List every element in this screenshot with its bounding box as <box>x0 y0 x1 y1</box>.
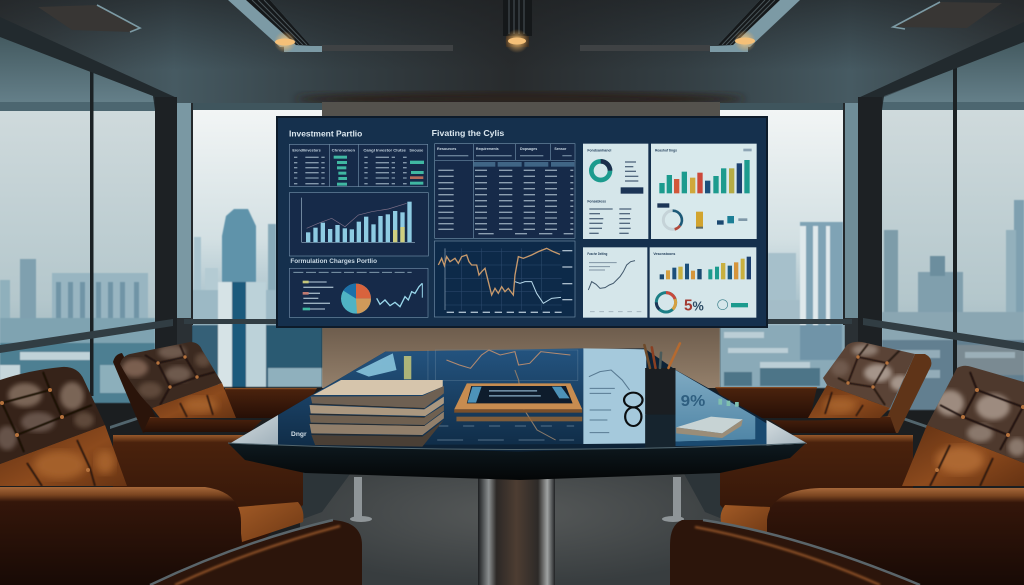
ceiling light left <box>274 31 296 53</box>
seat shell <box>113 435 303 560</box>
front arm <box>0 487 241 585</box>
donut <box>656 293 676 312</box>
dashboard left column <box>289 128 575 317</box>
far left mullion <box>90 64 94 396</box>
panel: bar charts <box>651 144 757 239</box>
wall display <box>276 116 768 328</box>
panel: performance table: Dopsages <box>520 146 538 151</box>
ceiling louvre centre <box>503 0 532 36</box>
glasses <box>624 393 643 426</box>
panel: line chart <box>434 241 575 317</box>
panel: performance table: Requirements <box>476 146 499 151</box>
pen holder <box>644 343 680 449</box>
heading: investment portfolio: Investment Partlio <box>289 128 362 138</box>
left column <box>155 97 193 398</box>
reflected line chart <box>446 350 570 368</box>
chair rear left <box>113 340 317 433</box>
conference table <box>228 343 807 480</box>
tablet <box>454 383 582 421</box>
glass top <box>230 343 807 452</box>
panel: trend line: Fusche Delting <box>587 251 608 256</box>
panel: performance table: Sensor <box>554 146 567 151</box>
upper cushion <box>0 365 106 465</box>
left highlight <box>230 415 278 445</box>
heading: formulation charges: Formulation Charges Portlio <box>290 258 377 265</box>
reflected bars <box>356 353 411 379</box>
ceiling vent left <box>38 5 140 32</box>
lower cushion <box>0 425 127 486</box>
window: far left with skyline <box>0 35 155 403</box>
pie chart <box>341 284 371 314</box>
lower cushion <box>808 385 890 418</box>
reflected small bars <box>718 399 739 407</box>
dashboard right column <box>583 144 757 318</box>
seat cushion <box>721 505 770 537</box>
chair front right <box>670 365 1024 585</box>
notebook <box>676 417 743 438</box>
side arm <box>225 388 317 418</box>
reflected text: Dngr <box>291 431 307 438</box>
seat base <box>770 416 896 433</box>
table bright rim <box>228 443 806 450</box>
ceiling louvre left <box>228 0 310 47</box>
reflected table <box>437 426 574 440</box>
panel: allocation donut <box>583 144 648 239</box>
ceiling vent right <box>893 2 1002 29</box>
window: centre left with skyline <box>192 103 322 387</box>
panel: trend line <box>583 247 647 318</box>
ceiling louvre right <box>718 0 800 47</box>
reflected trend <box>589 370 630 390</box>
side arm <box>715 387 817 418</box>
back frame <box>880 354 931 433</box>
panel: bars and 5 percent: Vesonstoons <box>653 251 676 256</box>
panel: allocation donut: Fonsabless <box>587 199 607 204</box>
carpet <box>300 465 730 585</box>
chair front left <box>0 365 362 585</box>
panel: holdings table: Cangl Investor Clutse <box>363 148 407 153</box>
panel: allocation <box>289 268 428 317</box>
table edge <box>228 443 806 480</box>
back wall <box>322 102 720 388</box>
line chart <box>377 283 422 307</box>
right header beam <box>858 22 1024 110</box>
reflected light panel centre <box>583 348 646 444</box>
seat cushion <box>238 502 303 542</box>
small arm <box>670 520 920 585</box>
window rails <box>0 318 1024 431</box>
reflected dark corner <box>675 417 766 446</box>
panel: holdings table: Erendlinvestors <box>292 148 321 153</box>
far right mullion <box>953 60 957 392</box>
left header beam <box>0 17 177 110</box>
panel: holdings table <box>289 144 428 187</box>
window: centre right with skyline <box>720 103 845 388</box>
seat base <box>143 417 262 432</box>
lower cushion <box>152 383 236 418</box>
panel: bar charts: Reashof tings <box>655 148 678 153</box>
slot fixture left <box>284 45 453 52</box>
screen reflection <box>278 348 583 445</box>
ceiling light right <box>734 30 756 52</box>
seat shell <box>720 435 913 560</box>
lower cushion <box>902 425 1024 486</box>
slot fixture right <box>580 45 748 52</box>
front arm <box>767 488 1024 585</box>
small arm <box>150 520 362 585</box>
chair rear right <box>715 340 931 433</box>
window frames <box>0 17 1024 398</box>
ceiling <box>0 0 1024 112</box>
right column <box>843 97 882 398</box>
reflected light panel right <box>675 370 755 442</box>
right highlight <box>766 420 807 445</box>
leg and shell right <box>662 470 725 522</box>
upper cushion <box>120 342 222 408</box>
panel: performance table: Resources <box>437 146 457 151</box>
table pedestal <box>478 470 555 585</box>
ceiling light centre <box>505 29 529 53</box>
reflected 9 percent: 9% <box>681 393 705 410</box>
back frame <box>113 353 160 433</box>
upper cushion <box>823 342 915 408</box>
leg and shell left <box>300 470 372 522</box>
window: far right with skyline <box>882 40 1024 410</box>
panel: performance table <box>435 144 575 238</box>
big figure: 5% <box>684 298 704 315</box>
reflected chart frame <box>428 350 578 381</box>
panel: allocation donut: Fondsanhanel <box>587 148 611 153</box>
panel: bar chart <box>289 193 428 256</box>
panel: bars and 5 percent <box>650 247 756 318</box>
paper stack <box>310 380 444 447</box>
heading: pivoting the cycles: Fivating the Cylis <box>432 128 505 138</box>
panel: holdings table: Chronomen <box>332 148 356 153</box>
upper cushion <box>925 365 1024 465</box>
panel: holdings table: Snouse <box>409 148 424 153</box>
